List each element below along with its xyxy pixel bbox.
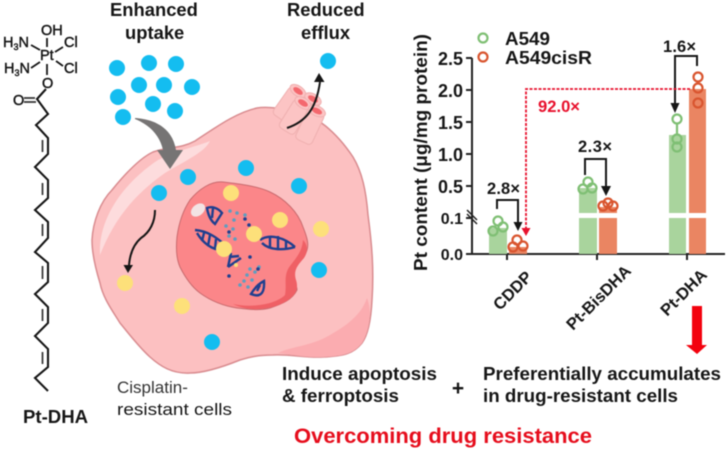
heading: enhanced uptake: uptake <box>125 22 184 43</box>
y axis labels: 2.0 <box>438 81 463 101</box>
y axis labels: 1.0 <box>438 145 463 165</box>
heading: reduced efflux: efflux <box>301 22 351 43</box>
comparison: 2.3x: 2.3× <box>578 138 612 156</box>
drug particles inside cell <box>151 160 327 350</box>
platinum head group: H <box>4 61 14 77</box>
y axis labels: 2.5 <box>438 49 463 69</box>
y axis labels: 0.5 <box>438 177 463 197</box>
icon: efflux transporter tubes <box>272 82 327 146</box>
comparison: 2.8x: 2.8× <box>487 180 520 198</box>
comparison: 92.0x dashed red <box>522 89 690 236</box>
heading: enhanced uptake <box>110 0 198 43</box>
arrow: big red <box>686 306 707 354</box>
platinum head group: O <box>42 76 53 92</box>
text: induce apoptosis: & ferroptosis <box>282 385 399 406</box>
x axis labels: Pt-DHA <box>657 266 711 320</box>
cell lower shading <box>278 298 370 357</box>
y axis labels: 0.0 <box>441 247 463 264</box>
arrow: uptake <box>135 118 183 169</box>
platinum head group: Pt <box>40 48 54 64</box>
conclusion: overcoming drug resistance: Overcoming drug resistance <box>294 424 592 448</box>
comparison: 92.0x dashed red: 92.0× <box>538 98 580 116</box>
cell highlight <box>100 141 210 255</box>
legend: A549 <box>505 28 550 49</box>
axes <box>466 58 725 260</box>
bar chart: Pt content <box>410 28 725 334</box>
nucleus <box>176 182 308 310</box>
cell body <box>92 107 373 373</box>
arrow: efflux <box>287 73 324 128</box>
platinum head group: H <box>3 35 13 51</box>
caption: cisplatin-resistant cells: Cisplatin- <box>117 378 188 397</box>
platinum head group: 3 <box>14 68 20 78</box>
bars: A549cisR <box>509 89 706 254</box>
platinum head group: N <box>18 35 29 51</box>
platinum head group: 3 <box>13 42 18 52</box>
platinum head group: Cl <box>64 35 78 51</box>
bars: A549 <box>489 135 686 254</box>
legend <box>478 28 592 68</box>
y axis labels: 1.5 <box>438 113 463 133</box>
comparison: 2.8x <box>487 180 522 231</box>
x axis labels <box>490 262 711 334</box>
comparison: 2.3x <box>578 138 612 196</box>
text: induce apoptosis <box>282 363 437 406</box>
plus sign: + <box>452 377 464 400</box>
text: preferentially accumulates: in drug-resistant cells <box>483 385 678 406</box>
y axis labels: 0.1 <box>441 211 463 228</box>
text: preferentially accumulates: Preferentially accumulates <box>483 363 721 384</box>
caption: cisplatin-resistant cells <box>117 378 232 419</box>
platinum head group: O <box>13 93 24 109</box>
platinum head group <box>3 23 78 109</box>
nucleolus <box>188 201 208 219</box>
drug particles outside cell <box>109 53 336 125</box>
molecule name: Pt-DHA <box>23 406 88 427</box>
fatty acid chain <box>35 89 48 391</box>
platinum head group: Cl <box>64 61 78 77</box>
platinum head group: N <box>20 61 30 77</box>
DNA fragments <box>195 207 295 295</box>
comparison: 1.6x: 1.6× <box>663 38 696 56</box>
structure: Pt-DHA molecule <box>3 23 88 427</box>
y axis title: Pt content (μg/mg protein) <box>410 34 431 271</box>
arrow: intracellular conversion <box>124 210 155 273</box>
comparison: 1.6x <box>663 38 697 113</box>
y axis labels <box>438 49 463 264</box>
heading: reduced efflux <box>287 0 365 43</box>
text: preferentially accumulates <box>483 363 721 406</box>
x axis labels: Pt-BisDHA <box>563 262 635 334</box>
platinum head group: OH <box>41 23 63 39</box>
caption: cisplatin-resistant cells: resistant cells <box>117 400 232 419</box>
text: induce apoptosis: Induce apoptosis <box>282 363 437 384</box>
legend: A549cisR <box>505 47 592 68</box>
x axis labels: CDDP <box>490 268 536 314</box>
yellow platinum particles <box>117 185 329 314</box>
data points: A549cisR <box>508 72 702 252</box>
nucleus shading <box>233 240 307 309</box>
data points: A549 <box>488 114 682 236</box>
